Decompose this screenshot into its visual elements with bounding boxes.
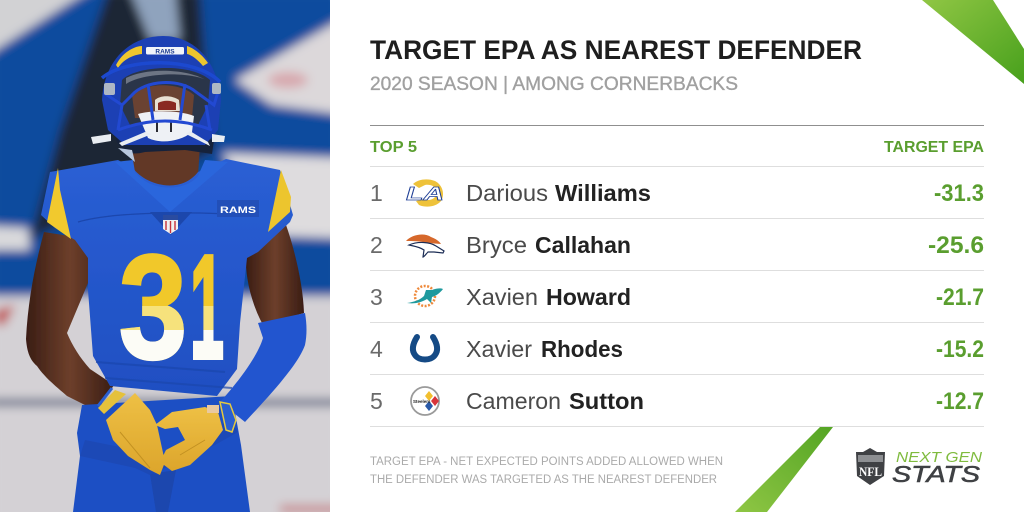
row 3: Xavien Howard: -21.7 <box>936 284 984 311</box>
column header: top 5: TOP 5 <box>370 139 417 156</box>
helmet visor <box>120 68 210 125</box>
arm sleeve <box>220 313 306 422</box>
footnote <box>370 456 723 486</box>
helmet yellow horn patches <box>116 46 142 68</box>
jersey number 31: 3 <box>119 225 187 390</box>
bottom green wedge <box>735 427 833 512</box>
title: TARGET EPA AS NEAREST DEFENDER <box>370 35 862 65</box>
chin strap <box>91 131 225 146</box>
row 4: Xavier Rhodes <box>370 336 984 363</box>
row 4: Xavier Rhodes: 4 <box>370 336 383 362</box>
row 5: Cameron Sutton: Cameron <box>466 388 561 414</box>
neck <box>132 150 200 186</box>
icon: Steelers logo <box>411 387 439 415</box>
icon: Colts horseshoe <box>413 337 437 360</box>
row 3: Xavien Howard: Xavien <box>466 284 538 310</box>
icon: Dolphins logo <box>407 286 443 306</box>
icon: NFL shield: NFL <box>859 464 882 479</box>
icon: Steelers logo: Steelers <box>413 399 431 404</box>
shorts and pants <box>73 396 250 512</box>
left arm <box>26 232 114 411</box>
subtitle: 2020 SEASON | AMONG CORNERBACKS <box>370 74 738 95</box>
row 3: Xavien Howard <box>370 284 984 311</box>
icon: Rams logo <box>406 179 444 207</box>
row 2: Bryce Callahan <box>370 232 984 259</box>
table rule lines <box>370 125 984 427</box>
right glove <box>155 407 223 471</box>
facemask <box>104 83 218 130</box>
jersey number 31 <box>120 253 224 362</box>
icon: Broncos logo <box>406 234 444 257</box>
row 3: Xavien Howard: 3 <box>370 284 383 310</box>
wristbands <box>98 390 126 414</box>
photo: football player in Rams uniform <box>0 0 340 512</box>
row 5: Cameron Sutton <box>370 387 984 415</box>
player face and mouth <box>132 85 194 118</box>
NFL Next Gen Stats logo: NEXT GEN <box>896 450 983 466</box>
jersey shoulder stripes <box>47 168 71 239</box>
row 5: Cameron Sutton: Sutton <box>569 388 644 414</box>
jersey torso <box>41 159 293 396</box>
row 1: Darious Williams <box>370 179 984 207</box>
row 3: Xavien Howard: Howard <box>546 284 631 310</box>
chin guard <box>138 111 194 141</box>
icon: Rams logo: LA <box>406 184 444 204</box>
row 5: Cameron Sutton: -12.7 <box>936 388 984 415</box>
helmet <box>91 36 225 162</box>
row 5: Cameron Sutton: 5 <box>370 388 383 414</box>
player figure <box>26 145 306 512</box>
player figure: 1 <box>190 225 224 390</box>
NFL Next Gen Stats logo <box>856 448 983 487</box>
row 2: Bryce Callahan: Callahan <box>535 232 631 258</box>
row 4: Xavier Rhodes: -15.2 <box>936 336 984 363</box>
row 2: Bryce Callahan: 2 <box>370 232 383 258</box>
player figure: 1 <box>190 225 224 390</box>
NFL collar shield <box>150 212 192 235</box>
right arm <box>246 222 304 325</box>
player figure: 1 <box>190 225 224 390</box>
column header: target EPA: TARGET EPA <box>884 139 984 156</box>
footnote: THE DEFENDER WAS TARGETED AS THE NEAREST DEFENDER <box>370 474 717 486</box>
helmet RAMS bumper: RAMS <box>155 48 175 56</box>
top right green wedge <box>922 0 1024 84</box>
row 1: Darious Williams: Darious <box>466 180 548 206</box>
row 4: Xavier Rhodes: Rhodes <box>541 336 623 362</box>
footnote: TARGET EPA - NET EXPECTED POINTS ADDED ALLOWED WHEN <box>370 456 723 468</box>
row 4: Xavier Rhodes: Xavier <box>466 336 532 362</box>
row 2: Bryce Callahan: -25.6 <box>928 232 984 259</box>
row 1: Darious Williams: Williams <box>555 180 651 206</box>
row 1: Darious Williams: 1 <box>370 180 383 206</box>
photo background: blurred stadium <box>0 0 340 512</box>
jersey RAMS wordmark: RAMS <box>220 205 256 216</box>
row 1: Darious Williams: -31.3 <box>934 180 984 207</box>
NFL Next Gen Stats logo: STATS <box>892 461 981 487</box>
jersey RAMS wordmark <box>217 200 259 217</box>
jersey number 31: 3 <box>119 225 187 390</box>
jersey number 31: 3 <box>119 225 187 390</box>
row 2: Bryce Callahan: Bryce <box>466 232 527 258</box>
left glove <box>106 393 165 475</box>
